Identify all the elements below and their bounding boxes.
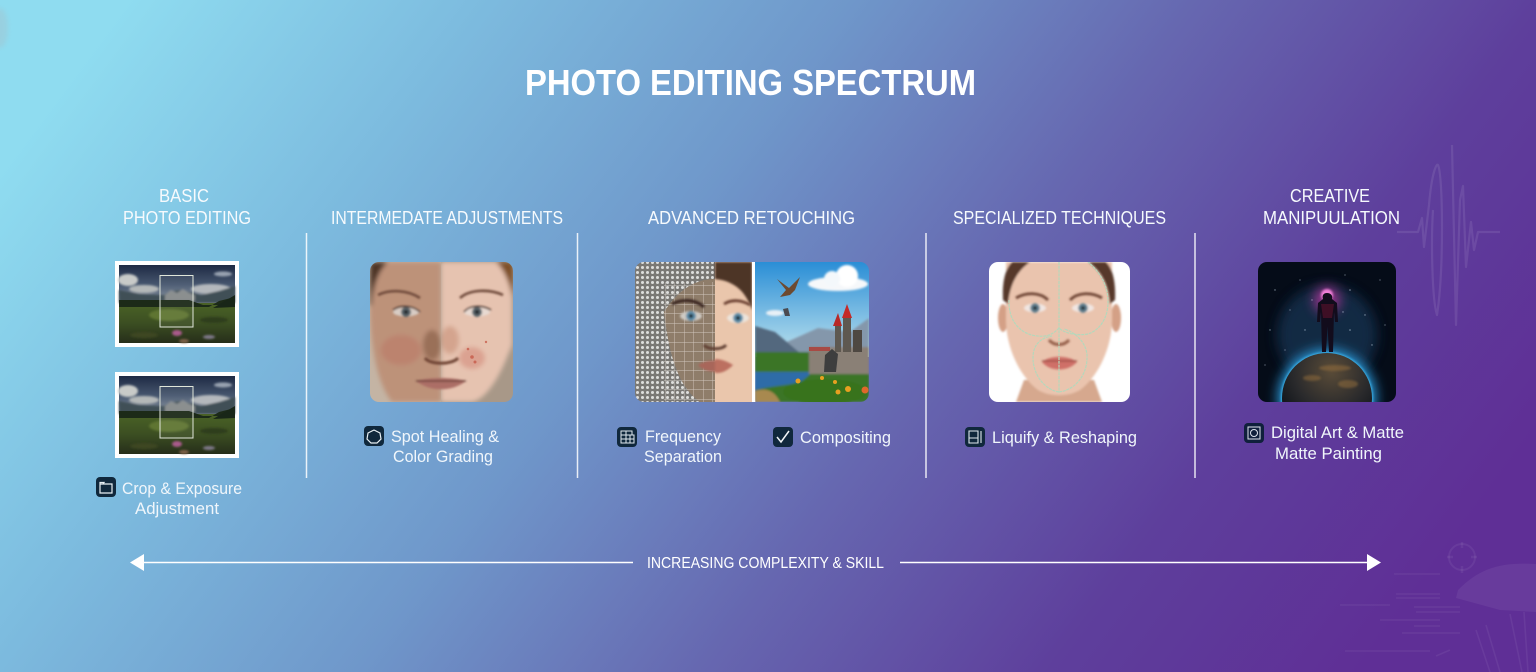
heading: intermediate adjustments: INTERMEDATE ADJUSTMENTS (331, 208, 563, 228)
icon: frequency separation (617, 427, 637, 447)
dividers (306, 233, 1195, 478)
arrow: left segment (130, 554, 633, 571)
heading: creative manipulation: MANIPUULATION (1263, 208, 1400, 228)
title: PHOTO EDITING SPECTRUM (525, 62, 976, 103)
photo: liquify face (989, 262, 1130, 402)
icon: liquify (965, 427, 985, 447)
label: digital art and matte painting: Digital Art & Matte (1271, 424, 1404, 442)
heading: basic photo editing: BASIC (159, 186, 209, 206)
panel: advanced retouching (617, 208, 891, 466)
label: spot healing and color grading: Spot Healing & (391, 428, 499, 446)
icon: compositing check (773, 427, 793, 447)
label: crop and exposure: Adjustment (135, 500, 219, 518)
photo: landscape before (115, 261, 239, 347)
label: spot healing and color grading (391, 428, 499, 466)
icon: digital art (1244, 423, 1264, 443)
decoration: waveform (1397, 145, 1500, 325)
photo: landscape after (115, 372, 239, 458)
arrow: increasing complexity and skill (130, 554, 1381, 572)
label: digital art and matte painting (1271, 424, 1404, 463)
decoration: hand and target icon (1340, 542, 1536, 672)
photo: mesh face (635, 262, 752, 402)
label: digital art and matte painting: Matte Painting (1275, 445, 1382, 463)
label: frequency separation: Frequency (645, 428, 722, 446)
panel: specialized techniques (953, 208, 1166, 447)
heading: creative manipulation (1263, 186, 1400, 228)
label: liquify and reshaping: Liquify & Reshaping (992, 429, 1137, 447)
label: spot healing and color grading: Color Grading (393, 448, 493, 466)
label: crop and exposure (122, 480, 242, 518)
heading: basic photo editing (123, 186, 251, 228)
label: frequency separation: Separation (644, 448, 722, 466)
label: frequency separation (644, 428, 722, 466)
arrow: right segment (900, 554, 1381, 571)
photo: face before and after (370, 262, 513, 402)
icon: spot healing (364, 426, 384, 446)
heading: advanced retouching: ADVANCED RETOUCHING (648, 208, 855, 228)
label: crop and exposure: Crop & Exposure (122, 480, 242, 498)
photo: fantasy castle scene (755, 262, 869, 405)
panel: intermediate adjustments (331, 208, 563, 466)
icon: folder (96, 477, 116, 497)
label: compositing: Compositing (800, 429, 891, 447)
heading: basic photo editing: PHOTO EDITING (123, 208, 251, 228)
heading: specialized techniques: SPECIALIZED TECHNIQUES (953, 208, 1166, 228)
arrow label: INCREASING COMPLEXITY & SKILL (647, 555, 884, 572)
panel: creative manipulation (1244, 186, 1404, 463)
panel: basic photo editing (96, 186, 251, 518)
heading: creative manipulation: CREATIVE (1290, 186, 1370, 206)
divider bar (752, 262, 756, 402)
decorative corner smudge (0, 8, 8, 48)
photo: frequency separation and compositing (635, 262, 869, 405)
photo: figure on planet (1258, 262, 1396, 402)
